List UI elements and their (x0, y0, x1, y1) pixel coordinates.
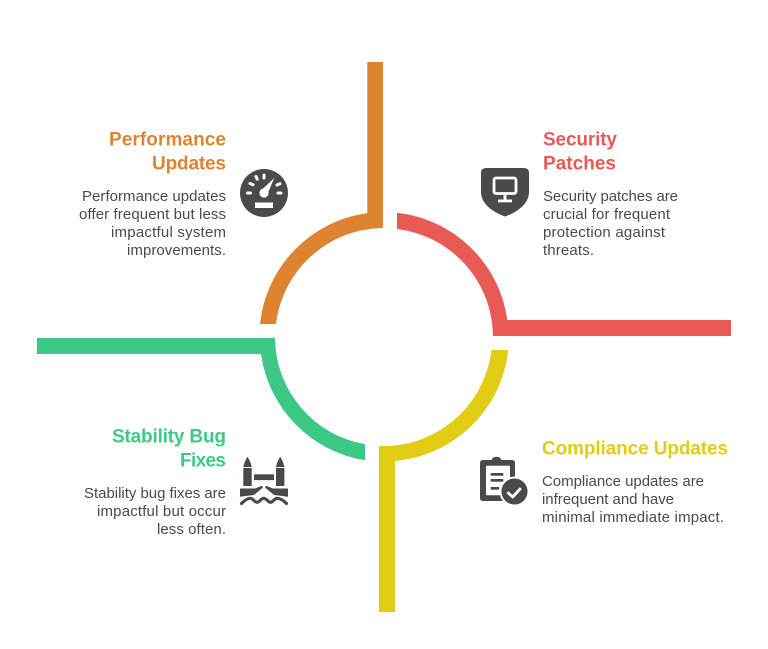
heading: performance updates: Updates (152, 154, 226, 174)
text: performance description: offer frequent but less (79, 206, 226, 223)
panel: security patches text (543, 130, 678, 259)
text: security description (543, 188, 678, 259)
text: security description: threats. (543, 242, 594, 259)
heading: stability bug fixes (112, 426, 226, 472)
text: compliance description: infrequent and have (542, 491, 674, 508)
text: performance description: impactful system (111, 224, 226, 241)
panel: compliance updates text (542, 438, 728, 526)
arc: stability bug fixes (green) (37, 338, 365, 460)
text: stability description: less often. (157, 521, 226, 538)
arc: compliance updates (yellow) (379, 350, 508, 612)
text: performance description: improvements. (127, 242, 226, 259)
heading: security patches: Patches (543, 154, 616, 174)
heading: compliance updates: Compliance Updates (542, 438, 728, 460)
heading: security patches (543, 130, 617, 174)
icon: bridge over water (240, 457, 288, 504)
heading: security patches: Security (543, 130, 617, 150)
text: security description: Security patches are (543, 188, 678, 205)
icon: shield with monitor (481, 168, 529, 216)
text: compliance description (542, 473, 724, 526)
text: security description: protection against (543, 224, 666, 241)
icon: clipboard with check (480, 457, 528, 506)
heading: stability bug fixes: Stability Bug (112, 426, 226, 448)
heading: stability bug fixes: Fixes (180, 450, 226, 472)
panel: performance updates text (79, 130, 226, 259)
heading: performance updates (109, 130, 226, 174)
heading: performance updates: Performance (109, 130, 226, 150)
text: stability description: Stability bug fixes are (84, 485, 226, 502)
text: performance description (79, 188, 226, 259)
arc: performance updates (orange) (260, 62, 383, 324)
panel: stability bug fixes text (84, 426, 226, 538)
text: compliance description: minimal immediate impact. (542, 509, 724, 526)
text: stability description (84, 485, 226, 538)
text: performance description: Performance updates (82, 188, 226, 205)
icon: speedometer (240, 169, 288, 217)
arc: security patches (red) (397, 213, 731, 336)
text: security description: crucial for frequent (543, 206, 671, 223)
text: stability description: impactful but occur (97, 503, 226, 520)
text: compliance description: Compliance updates are (542, 473, 704, 490)
